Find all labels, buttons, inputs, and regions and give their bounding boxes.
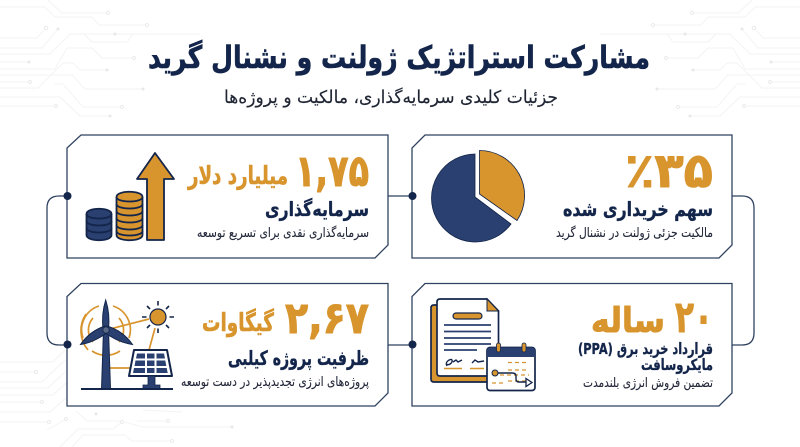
icon: contract and calendar: [431, 299, 535, 390]
panel: project capacity: [67, 284, 388, 406]
unit: گیگاوات: [202, 308, 274, 338]
description: تضمین فروش انرژی بلندمدت: [583, 376, 713, 391]
value: ٪۳۵: [625, 143, 713, 199]
connector dots: [64, 192, 416, 348]
value: ۲۰: [675, 292, 713, 343]
panel: investment: [67, 135, 388, 258]
heading: ظرفیت پروژه کیلبی: [228, 346, 369, 371]
subtitle: جزئیات کلیدی سرمایه‌گذاری، مالکیت و پروژه‌ها: [224, 87, 558, 108]
heading: قرارداد خرید برق (PPA): [578, 340, 713, 358]
title: مشارکت استراتژیک ژولنت و نشنال گرید: [148, 39, 650, 76]
heading: سهم خریداری شده: [563, 197, 713, 221]
icon: pie chart: [432, 150, 525, 242]
unit: ساله: [591, 301, 665, 341]
heading: سرمایه‌گذاری: [265, 197, 369, 221]
description: مالکیت جزئی ژولنت در نشنال گرید: [556, 225, 713, 241]
icon: coins and arrow: [86, 153, 174, 240]
panel: purchased stake: [412, 135, 732, 258]
unit: میلیارد دلار: [187, 161, 288, 190]
value: ۱,۷۵: [295, 146, 369, 197]
description: سرمایه‌گذاری نقدی برای تسریع توسعه: [197, 225, 369, 241]
value: ۲,۶۷: [285, 293, 369, 344]
connector lines: [47, 196, 754, 345]
icon: wind turbine, sun and solar panel: [80, 300, 174, 389]
heading second line: مایکروسافت: [641, 356, 713, 374]
panel: PPA contract: [412, 284, 732, 406]
description: پروژه‌های انرژی تجدیدپذیر در دست توسعه: [181, 375, 369, 390]
